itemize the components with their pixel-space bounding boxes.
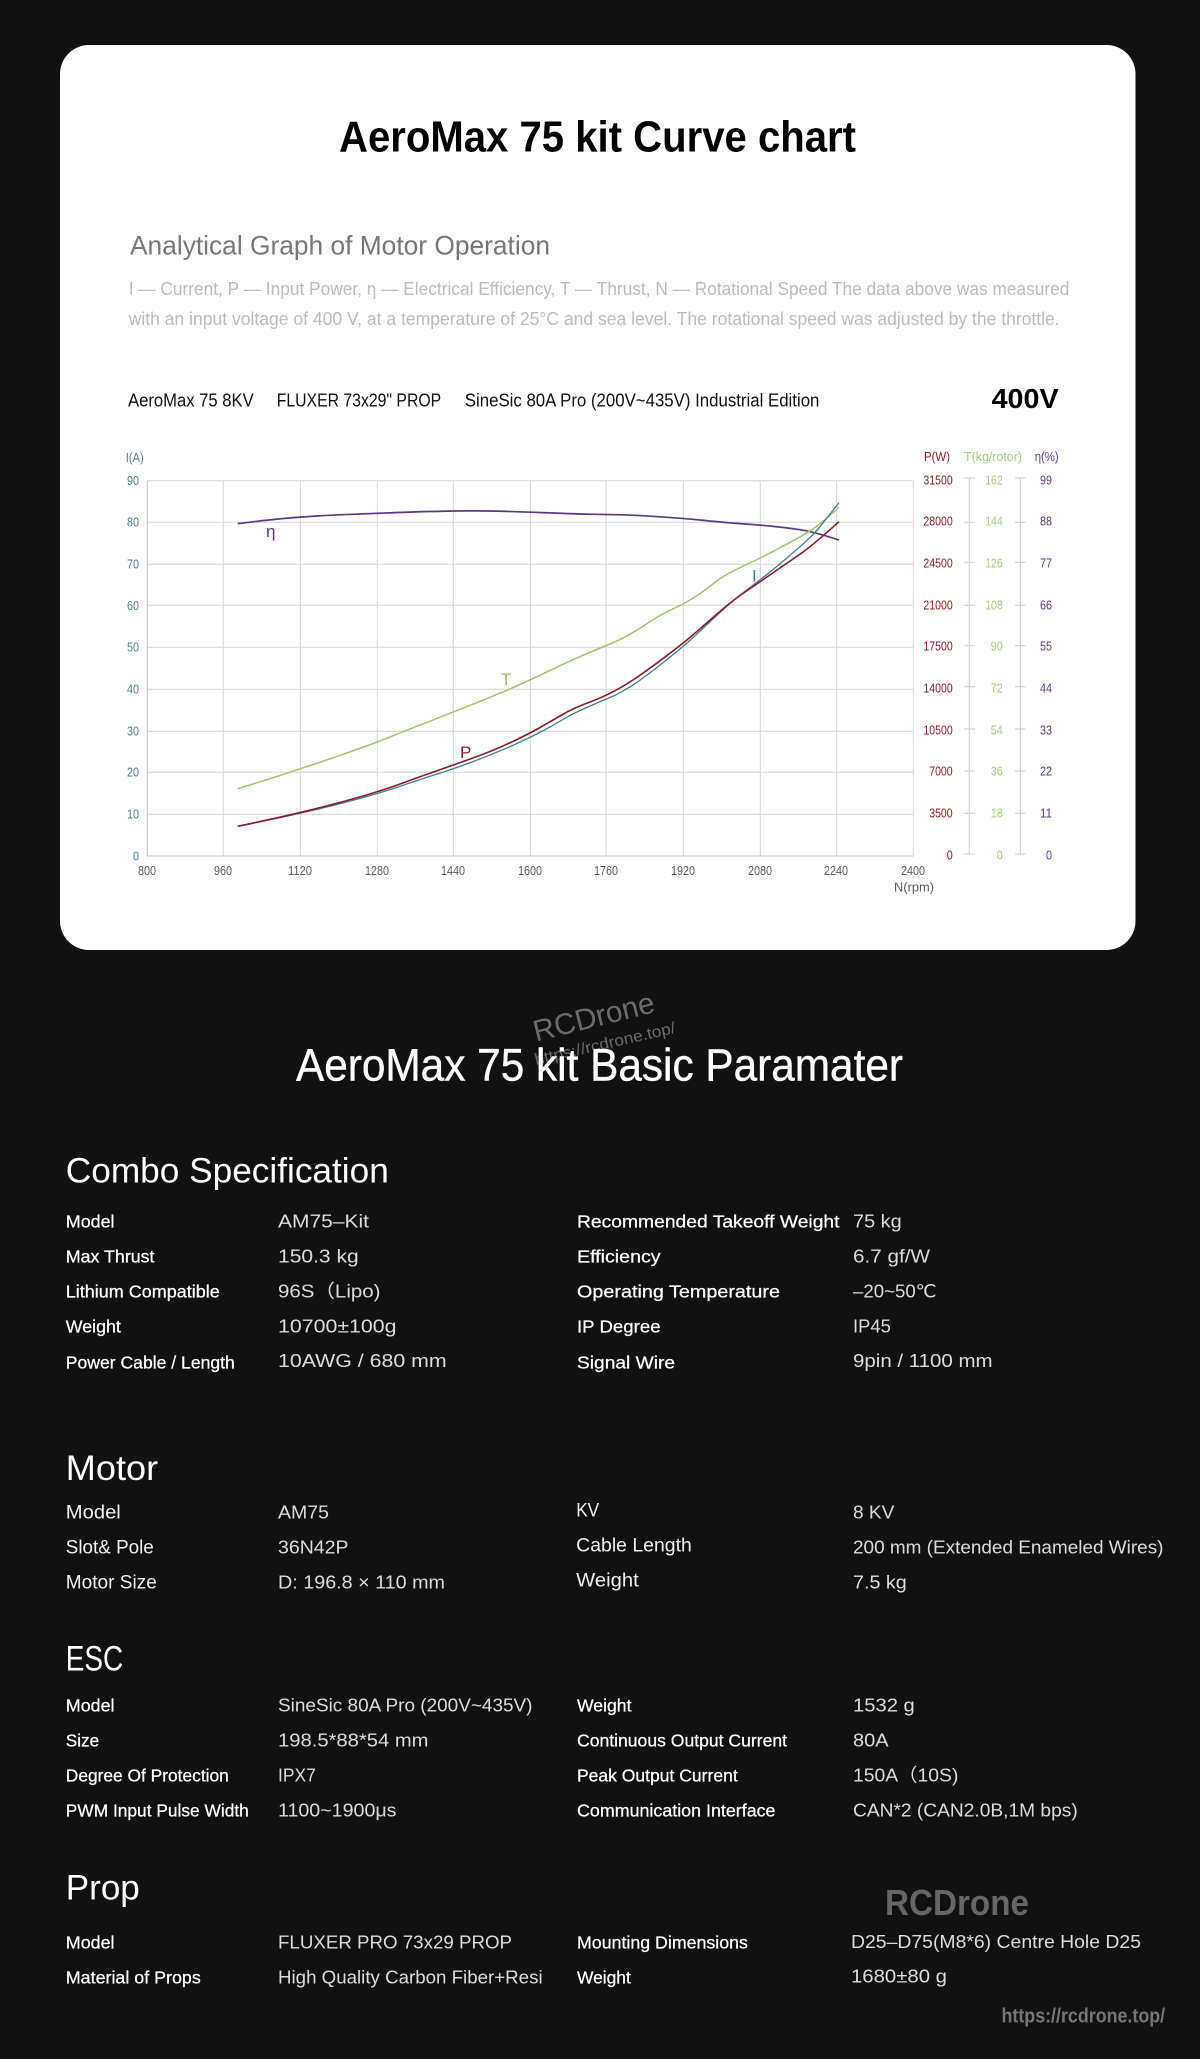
prop values right: D25–D75(M8*6) Centre Hole D25 [851,1931,1141,1952]
motor values left [278,1501,445,1592]
prop values left: High Quality Carbon Fiber+Resi [278,1966,543,1987]
description text: I — Current, P — Input Power, η — Electrical Efficiency, T — Thrust, N — Rotational Speed The data above was measured [129,278,1069,299]
bottom axis: rotational speed: 1600 [518,864,542,878]
bottom axis: rotational speed: 1280 [365,864,389,878]
ESC labels right [577,1696,787,1821]
prop labels right [577,1932,748,1987]
left axis: current: 40 [127,682,139,696]
watermark: RCDrone rotated [530,986,678,1069]
row values right: –20~50℃ [853,1280,937,1301]
section: ESC [66,1640,1078,1821]
test configuration line: SineSic 80A Pro (200V~435V) Industrial Edition [465,391,819,411]
left axis: current: 80 [127,516,139,530]
prop values right: 1680±80 g [851,1966,947,1987]
left axis: current: I(A) [126,451,144,465]
right axis: power: 10500 [923,724,953,738]
curve: current [238,503,839,826]
row labels right: Recommended Takeoff Weight [577,1211,840,1231]
watermark: RCDrone rotated: RCDrone [530,986,658,1048]
right axis: efficiency: 77 [1040,556,1052,570]
right axis: thrust: 108 [985,598,1003,612]
title: basic parameter: AeroMax 75 kit Basic Paramater [296,1040,903,1091]
left axis: current: 20 [127,766,139,780]
ESC labels left: PWM Input Pulse Width [66,1801,249,1821]
prop values right [851,1931,1141,1987]
left axis: current: 70 [127,558,139,572]
bottom axis: rotational speed: 800 [138,864,156,878]
ESC values right: 1532 g [853,1695,915,1716]
prop values left: FLUXER PRO 73x29 PROP [278,1931,512,1952]
right axis: efficiency: 11 [1040,806,1052,820]
description text: with an input voltage of 400 V, at a temperature of 25°C and sea level. The rotational speed was adjusted by the throttle. [128,308,1060,329]
ESC labels left: Model [66,1696,114,1716]
left axis: current: 50 [127,640,139,654]
row labels left: Model [66,1211,114,1231]
ESC values left [278,1695,532,1821]
left axis: current: 0 [133,850,139,864]
right axis: power: P(W) [924,450,950,464]
ESC labels right: Weight [577,1696,632,1716]
heading: prop: Prop [66,1868,140,1907]
row values left: 10AWG / 680 mm [278,1350,447,1371]
row values left: 150.3 kg [278,1246,359,1267]
ESC values left: 198.5*88*54 mm [278,1730,428,1751]
right axis: efficiency [1035,450,1059,862]
motor values right: 7.5 kg [853,1571,907,1592]
bottom axis: rotational speed [138,864,934,895]
motor labels right: KV [576,1501,599,1522]
right axis: efficiency: η(%) [1035,450,1059,464]
prop values left [278,1931,543,1987]
prop labels left: Material of Props [66,1967,201,1987]
prop labels left [66,1932,201,1987]
right axis: power: 7000 [929,764,953,778]
ESC values right: CAN*2 (CAN2.0B,1M bps) [853,1800,1078,1821]
row labels right: Operating Temperature [577,1281,780,1301]
ESC values left: IPX7 [278,1765,316,1786]
section: prop [66,1868,1141,1987]
right axis: thrust: 36 [991,764,1003,778]
prop labels right: Mounting Dimensions [577,1932,748,1952]
ESC labels left: Size [66,1731,99,1751]
right axis: efficiency: 22 [1040,764,1052,778]
right axis: power: 24500 [923,556,953,570]
bottom axis: rotational speed: 1440 [441,864,465,878]
right axis: efficiency: 33 [1040,724,1052,738]
right axis: thrust [964,450,1022,862]
ESC labels right: Communication Interface [577,1801,776,1821]
motor values right: 8 KV [853,1501,895,1522]
right axis: efficiency: 88 [1040,514,1052,528]
right axis: power: 17500 [923,640,953,654]
ESC labels left [66,1696,249,1821]
chart: motor operation curves [126,450,1059,895]
curve labels [266,522,757,762]
voltage label: 400V [992,383,1059,414]
heading: combo specification: Combo Specification [66,1152,389,1191]
right axis: efficiency: 55 [1040,640,1052,654]
row labels right: Signal Wire [577,1352,675,1372]
right axis: thrust: 72 [991,682,1003,696]
description text [128,278,1069,329]
section: combo specification [66,1152,993,1372]
right axis: thrust: T(kg/rotor) [964,450,1022,464]
bottom axis: rotational speed: 2240 [824,864,848,878]
bottom axis: rotational speed: N(rpm) [894,881,934,895]
left axis: current: 90 [127,474,139,488]
ESC values left: SineSic 80A Pro (200V~435V) [278,1695,532,1716]
curve labels: I [752,566,757,586]
ESC labels right: Continuous Output Current [577,1731,787,1751]
motor values right: 200 mm (Extended Enameled Wires) [853,1536,1164,1557]
right axis: efficiency: 99 [1040,474,1052,488]
row labels right [577,1211,840,1372]
ESC values right: 80A [853,1730,889,1751]
curve: efficiency [238,511,839,540]
row values left: 10700±100g [278,1316,396,1337]
ESC values right: 150A（10S) [853,1765,958,1786]
row labels right: IP Degree [577,1317,661,1337]
motor labels left: Motor Size [66,1572,157,1593]
ESC values right [853,1695,1078,1821]
right axis: power: 14000 [923,682,953,696]
subheading: analytical graph: Analytical Graph of Motor Operation [130,231,550,261]
motor labels right [576,1501,692,1592]
curve labels: T [501,670,511,689]
row labels left [66,1211,235,1372]
section: motor [66,1449,1163,1593]
watermark: url: https://rcdrone.top/ [1002,2006,1165,2028]
panel: curve chart card [60,45,1136,950]
bottom axis: rotational speed: 960 [214,864,232,878]
motor values left: 36N42P [278,1536,348,1557]
row labels left: Power Cable / Length [66,1352,235,1372]
right axis: power [923,450,953,862]
curve: input power [238,522,839,826]
right axis: thrust: 144 [985,514,1003,528]
right axis: thrust: 18 [991,806,1003,820]
row values right: IP45 [853,1316,891,1337]
row values right: 9pin / 1100 mm [853,1350,993,1371]
heading: motor: Motor [66,1449,158,1488]
plot grid [147,481,913,856]
row labels left: Max Thrust [66,1247,155,1267]
right axis: power: 0 [947,848,953,862]
watermark: RCDrone rotated: https://rcdrone.top/ [533,1020,678,1069]
row labels left: Lithium Compatible [66,1281,220,1301]
motor values left: D: 196.8 × 110 mm [278,1571,445,1592]
right axis: thrust: 54 [991,724,1003,738]
right axis: power: 21000 [923,598,953,612]
heading: ESC: ESC [66,1640,123,1679]
right axis: power: 31500 [923,474,953,488]
ESC values left: 1100~1900μs [278,1800,396,1821]
right axis: thrust: 162 [985,474,1003,488]
motor values left: AM75 [278,1501,329,1522]
right axis: power: 3500 [929,806,953,820]
prop labels left: Model [66,1932,114,1952]
motor labels right: Weight [576,1571,639,1592]
left axis: current: 30 [127,724,139,738]
row values left [278,1210,447,1371]
motor labels left: Model [66,1502,121,1523]
row values left: 96S（Lipo) [278,1280,380,1301]
right axis: efficiency: 44 [1040,682,1052,696]
left axis: current: 60 [127,599,139,613]
curve labels: η [266,522,275,541]
right axis: power: 28000 [923,514,953,528]
motor labels right: Cable Length [576,1536,692,1557]
bottom axis: rotational speed: 1920 [671,864,695,878]
test configuration line: FLUXER 73x29" PROP [277,391,441,411]
row values right: 75 kg [853,1210,902,1231]
bottom axis: rotational speed: 1120 [288,864,312,878]
right axis: thrust: 126 [985,556,1003,570]
curve labels: P [460,743,471,762]
ESC labels right: Peak Output Current [577,1766,738,1786]
row values right: 6.7 gf/W [853,1246,931,1267]
curve: thrust [238,507,839,789]
right axis: efficiency: 0 [1046,848,1052,862]
right axis: thrust: 0 [997,848,1003,862]
right axis: thrust: 90 [991,640,1003,654]
row values right [853,1210,993,1371]
motor labels left: Slot& Pole [66,1537,154,1558]
row labels left: Weight [66,1317,121,1337]
prop labels right: Weight [577,1967,631,1987]
left axis: current [126,451,144,864]
bottom axis: rotational speed: 2400 [901,864,925,878]
motor labels left [66,1502,157,1593]
left axis: current: 10 [127,808,139,822]
row labels right: Efficiency [577,1247,661,1267]
bottom axis: rotational speed: 2080 [748,864,772,878]
row values left: AM75–Kit [278,1210,369,1231]
test configuration line: AeroMax 75 8KV [128,391,254,411]
bottom axis: rotational speed: 1760 [594,864,618,878]
ESC labels left: Degree Of Protection [66,1766,229,1786]
title: curve chart: AeroMax 75 kit Curve chart [339,113,856,162]
test configuration line [128,391,819,411]
motor values right [853,1501,1164,1592]
watermark: RCDrone: RCDrone [885,1882,1029,1923]
right axis: efficiency: 66 [1040,598,1052,612]
